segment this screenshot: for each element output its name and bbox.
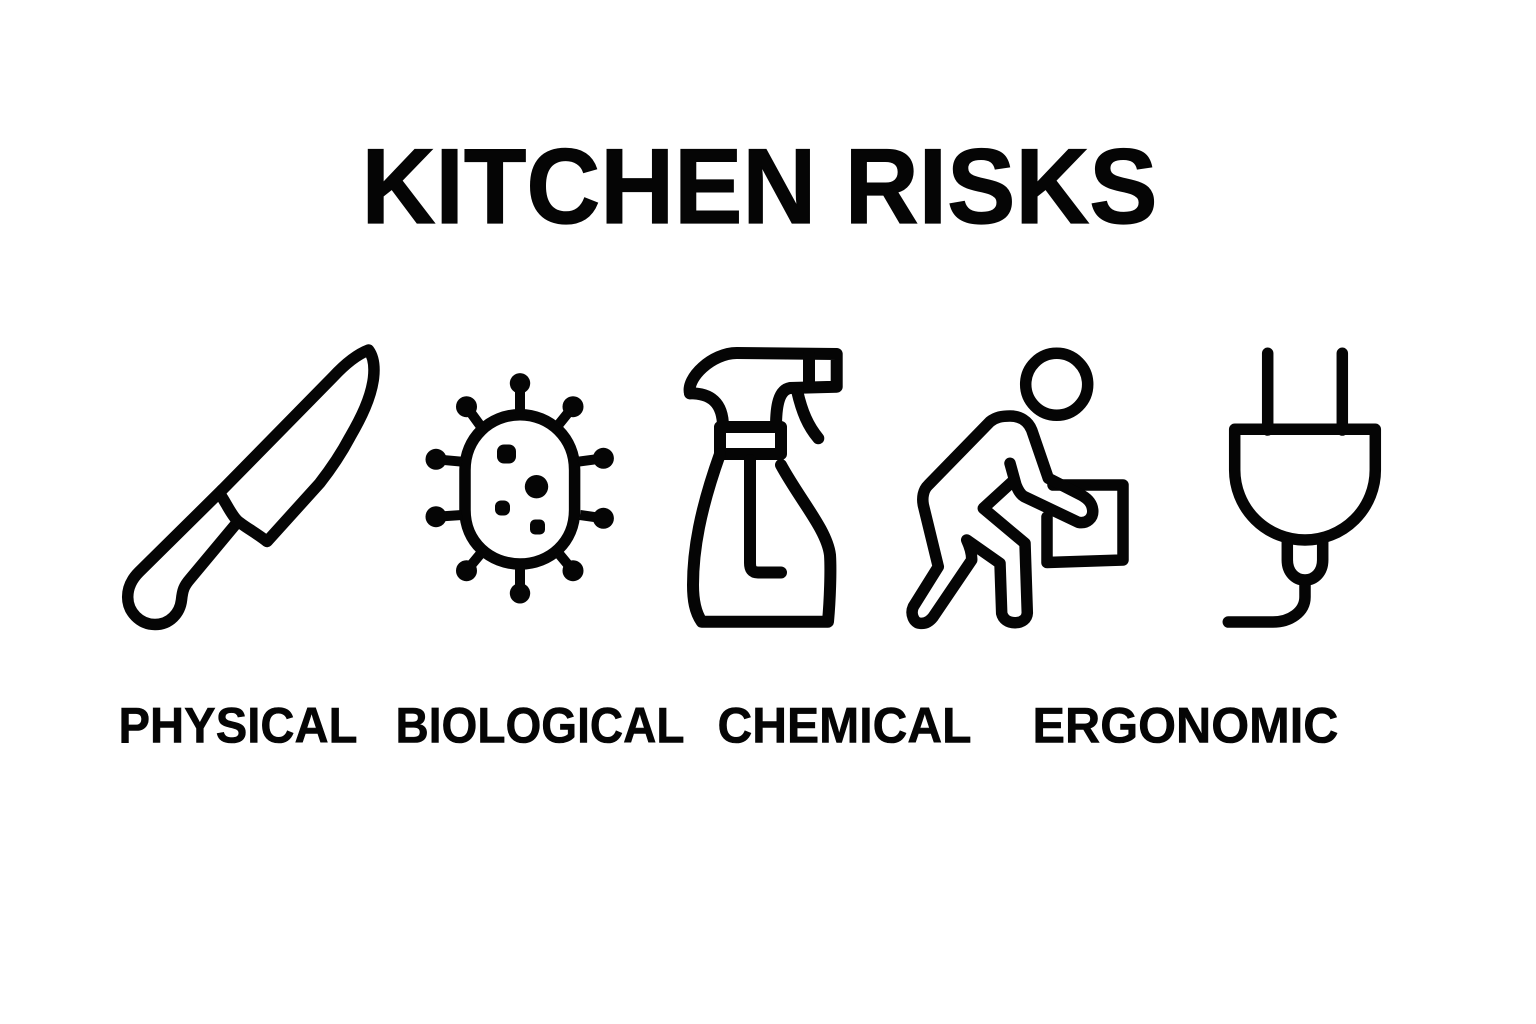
label: chemical: CHEMICAL [718,698,972,754]
icon: electric plug [1228,353,1375,622]
label: biological: BIOLOGICAL [396,698,684,754]
icon: spray bottle [690,353,837,622]
label: ergonomic: ERGONOMIC [1032,698,1338,754]
icon: knife [128,350,374,624]
icon: bacteria [426,373,614,604]
icon: person lifting box [912,353,1123,623]
label: physical: PHYSICAL [118,698,358,754]
title: KITCHEN RISKS [362,126,1158,246]
